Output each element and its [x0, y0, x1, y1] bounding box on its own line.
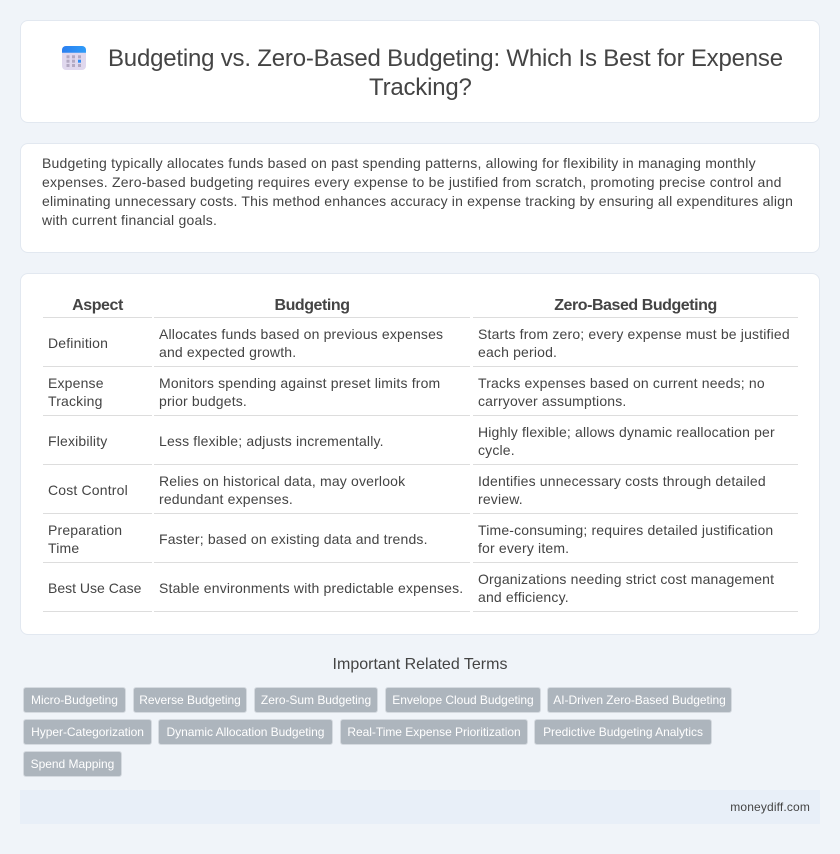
row: Best Use Case: Stable environments with predictable expenses. [159, 580, 463, 596]
icon: calendar [62, 46, 86, 70]
row: Expense Tracking: Tracks expenses based on current needs; no [478, 375, 765, 391]
row: Definition: Definition [48, 335, 108, 351]
row: Cost Control: redundant expenses. [159, 491, 293, 507]
panel: intro [20, 143, 820, 253]
row: Definition: each period. [478, 344, 557, 360]
related term tags: Predictive Budgeting Analytics [543, 725, 703, 739]
row: Expense Tracking [43, 375, 798, 416]
related term tags: Micro-Budgeting [31, 693, 118, 707]
table header: Budgeting [274, 297, 350, 314]
related term tags: Hyper-Categorization [31, 725, 144, 739]
row: Preparation Time: for every item. [478, 540, 569, 556]
row: Cost Control [43, 473, 798, 514]
panel: header [20, 20, 820, 123]
related term tags: Zero-Sum Budgeting [261, 693, 371, 707]
row: Definition [43, 326, 798, 367]
table header: Zero-Based Budgeting [554, 297, 717, 314]
related term tags: Reverse Budgeting [139, 693, 241, 707]
row: Preparation Time: Time [48, 540, 79, 556]
row: Flexibility: cycle. [478, 442, 515, 458]
row: Definition: Starts from zero; every expense must be justified [478, 326, 790, 342]
table header: Aspect [72, 297, 123, 314]
intro text: Budgeting typically allocates funds based on past spending patterns, allowing for flexibility in managing monthly [42, 155, 756, 171]
row: Preparation Time: Time-consuming; requires detailed justification [478, 522, 773, 538]
row: Preparation Time: Faster; based on existing data and trends. [159, 531, 428, 547]
row: Cost Control: review. [478, 491, 523, 507]
intro text: eliminating unnecessary costs. This method enhances accuracy in expense tracking by ensuring all expenditures align [42, 193, 793, 209]
related term tags: AI-Driven Zero-Based Budgeting [553, 693, 726, 707]
table header [43, 297, 798, 318]
panel: comparison table [20, 273, 820, 635]
title: Budgeting vs. Zero-Based Budgeting: Which Is Best for Expense [108, 45, 783, 72]
row: Flexibility: Flexibility [48, 433, 107, 449]
related term tags: Spend Mapping [31, 757, 114, 771]
row: Definition: and expected growth. [159, 344, 296, 360]
row: Flexibility: Less flexible; adjusts incrementally. [159, 433, 384, 449]
row: Cost Control: Cost Control [48, 482, 128, 498]
footer [20, 790, 820, 824]
row: Cost Control: Relies on historical data, may overlook [159, 473, 405, 489]
intro text: expenses. Zero-based budgeting requires every expense to be justified from scratch, promoting precise control and [42, 174, 782, 190]
row: Expense Tracking: carryover assumptions. [478, 393, 626, 409]
related term tags: Real-Time Expense Prioritization [347, 725, 521, 739]
row: Expense Tracking: prior budgets. [159, 393, 247, 409]
title [108, 45, 783, 101]
row: Cost Control: Identifies unnecessary costs through detailed [478, 473, 766, 489]
footer source: moneydiff.com [730, 800, 810, 814]
row: Best Use Case [43, 571, 798, 612]
related term tags: Envelope Cloud Budgeting [392, 693, 534, 707]
row: Expense Tracking: Monitors spending against preset limits from [159, 375, 440, 391]
title: Tracking? [369, 74, 472, 101]
row: Best Use Case: Organizations needing strict cost management [478, 571, 774, 587]
row: Flexibility [43, 424, 798, 465]
row: Expense Tracking: Expense [48, 375, 104, 391]
row: Preparation Time [43, 522, 798, 563]
row: Flexibility: Highly flexible; allows dynamic reallocation per [478, 424, 775, 440]
heading: related terms: Important Related Terms [333, 656, 507, 673]
row: Preparation Time: Preparation [48, 522, 122, 538]
intro text [42, 155, 793, 228]
row: Best Use Case: and efficiency. [478, 589, 569, 605]
related term tags: Dynamic Allocation Budgeting [167, 725, 324, 739]
related term tags [23, 687, 732, 777]
intro text: with current financial goals. [42, 212, 217, 228]
row: Definition: Allocates funds based on previous expenses [159, 326, 443, 342]
row: Best Use Case: Best Use Case [48, 580, 141, 596]
row: Expense Tracking: Tracking [48, 393, 103, 409]
